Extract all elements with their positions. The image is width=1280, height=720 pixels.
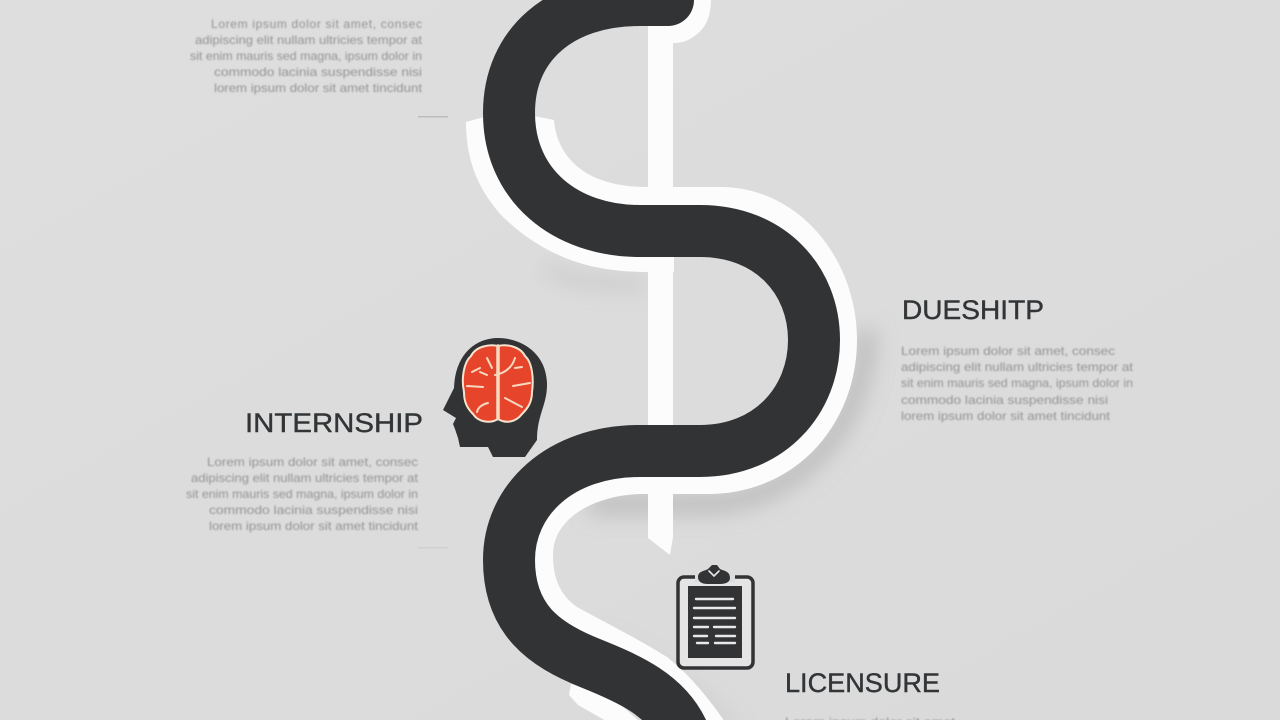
clipboard sheet xyxy=(688,586,742,658)
top text block: Lorem ipsum dolor sit amet, consec xyxy=(211,17,422,31)
clipboard gap xyxy=(695,570,735,582)
short rule lower xyxy=(418,547,448,548)
heading: licensure: LICENSURE xyxy=(785,668,940,698)
white top hook xyxy=(648,0,711,43)
top text block: adipiscing elit nullam ultricies tempor at xyxy=(195,33,423,47)
head silhouette xyxy=(443,338,547,457)
internship text block: commodo lacinia suspendisse nisi xyxy=(209,503,418,517)
internship text block: sit enim mauris sed magna, ipsum dolor in xyxy=(186,487,418,501)
top text block xyxy=(190,17,423,95)
internship text block: Lorem ipsum dolor sit amet, consec xyxy=(207,455,418,469)
dueship text block: Lorem ipsum dolor sit amet, consec xyxy=(901,344,1115,358)
internship text block: lorem ipsum dolor sit amet tincidunt xyxy=(209,519,419,533)
top text block: commodo lacinia suspendisse nisi xyxy=(214,65,422,79)
dueship text block: adipiscing elit nullam ultricies tempor at xyxy=(901,360,1134,374)
brain folds xyxy=(467,346,530,418)
top text block: lorem ipsum dolor sit amet tincidunt xyxy=(214,81,423,95)
white road outline: right bulge and lower xyxy=(510,187,857,720)
heading: dueship: DUESHITP xyxy=(902,295,1044,325)
clipboard icon xyxy=(678,565,753,668)
dark winding road xyxy=(509,0,814,720)
dueship text block: commodo lacinia suspendisse nisi xyxy=(901,393,1108,407)
heading: internship: INTERNSHIP xyxy=(245,408,423,438)
dueship text block xyxy=(901,344,1134,423)
white road outline: bottom xyxy=(569,684,640,720)
dueship text block: lorem ipsum dolor sit amet tincidunt xyxy=(901,409,1111,423)
brain xyxy=(463,345,533,422)
clipboard lines xyxy=(694,571,735,643)
clipboard clip xyxy=(698,565,730,584)
top text block: sit enim mauris sed magna, ipsum dolor in xyxy=(190,49,422,63)
clipboard frame xyxy=(678,577,753,668)
internship text block: adipiscing elit nullam ultricies tempor at xyxy=(191,471,419,485)
white vertical bar xyxy=(648,28,673,555)
short rule xyxy=(418,116,448,118)
dueship text block: sit enim mauris sed magna, ipsum dolor in xyxy=(901,376,1133,390)
white road outline: upper xyxy=(466,116,720,272)
road shadow xyxy=(545,268,866,720)
head with brain icon xyxy=(443,338,547,457)
internship text block xyxy=(186,455,419,533)
